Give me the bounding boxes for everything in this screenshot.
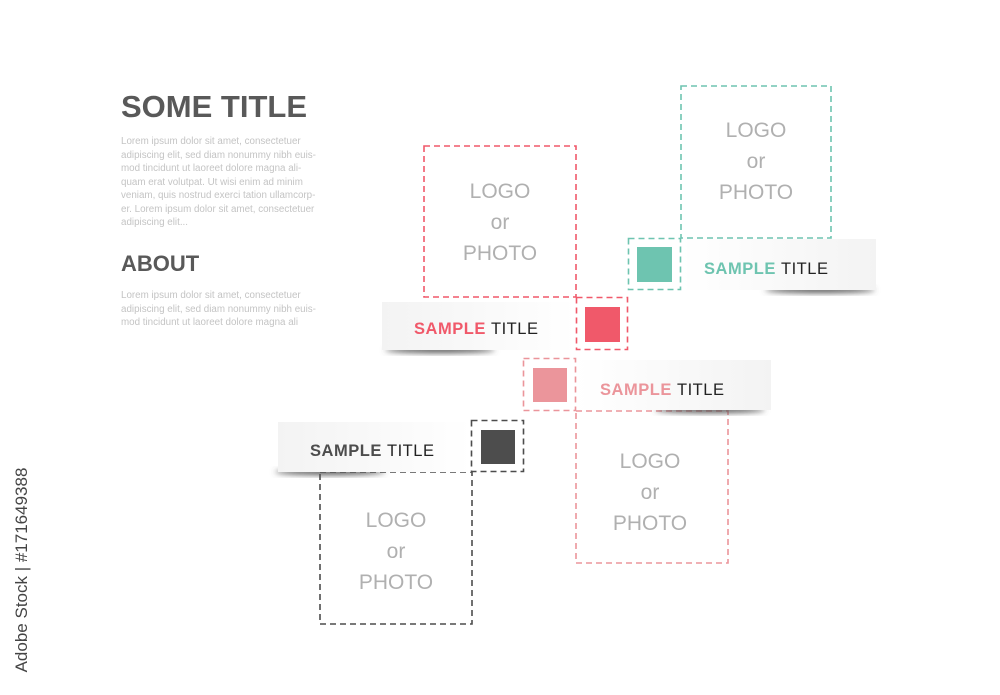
heading: about: ABOUT: [121, 251, 199, 276]
photo box red: PHOTO: [463, 242, 537, 265]
photo box teal: [681, 86, 831, 238]
photo box teal: or: [747, 150, 765, 173]
photo box red: or: [491, 211, 509, 234]
photo box pink: [576, 411, 728, 563]
banner teal: SAMPLE TITLE: [704, 260, 828, 278]
item: red: [382, 146, 628, 353]
banner pink: [576, 360, 771, 413]
banner red: SAMPLE TITLE: [414, 320, 538, 338]
text block: intro: Lorem ipsum dolor sit amet, consectetuer adipiscing elit, sed diam nonummy nibh euis-mod tincidunt ut laoreet dolore magna ali-quam erat volutpat. Ut wisi enim ad minim veniam, quis nostrud exerci tation ullamcorp-er. Lorem ipsum dolor sit amet, consectetuer adipiscing elit...: [121, 136, 316, 228]
banner teal: [681, 239, 876, 293]
photo box pink: or: [641, 481, 659, 504]
banner dark: [275, 422, 471, 475]
photo box teal: LOGO: [726, 119, 786, 142]
icon square red: [576, 298, 628, 350]
icon square dark: [472, 420, 524, 472]
title: SOME TITLE: [121, 89, 307, 124]
photo box dark: PHOTO: [359, 571, 433, 594]
icon square teal: [628, 238, 680, 290]
item: pink: [524, 358, 771, 563]
photo box red: [424, 146, 576, 297]
watermark: Adobe Stock | #171649388: [12, 468, 31, 672]
text block: about: Lorem ipsum dolor sit amet, consectetuer adipiscing elit, sed diam nonummy nibh euis-mod tincidunt ut laoreet dolore magna ali: [121, 290, 316, 328]
photo box dark: LOGO: [366, 509, 426, 532]
banner pink: SAMPLE TITLE: [600, 381, 724, 399]
photo box pink: PHOTO: [613, 512, 687, 535]
photo box red: LOGO: [470, 180, 530, 203]
photo box dark: [320, 472, 472, 624]
icon square pink: [524, 358, 576, 410]
banner dark: SAMPLE TITLE: [310, 442, 434, 460]
photo box dark: or: [387, 540, 405, 563]
item: teal: [628, 86, 876, 293]
item: dark: [275, 420, 524, 624]
photo box teal: PHOTO: [719, 181, 793, 204]
banner red: [382, 302, 576, 353]
photo box pink: LOGO: [620, 450, 680, 473]
